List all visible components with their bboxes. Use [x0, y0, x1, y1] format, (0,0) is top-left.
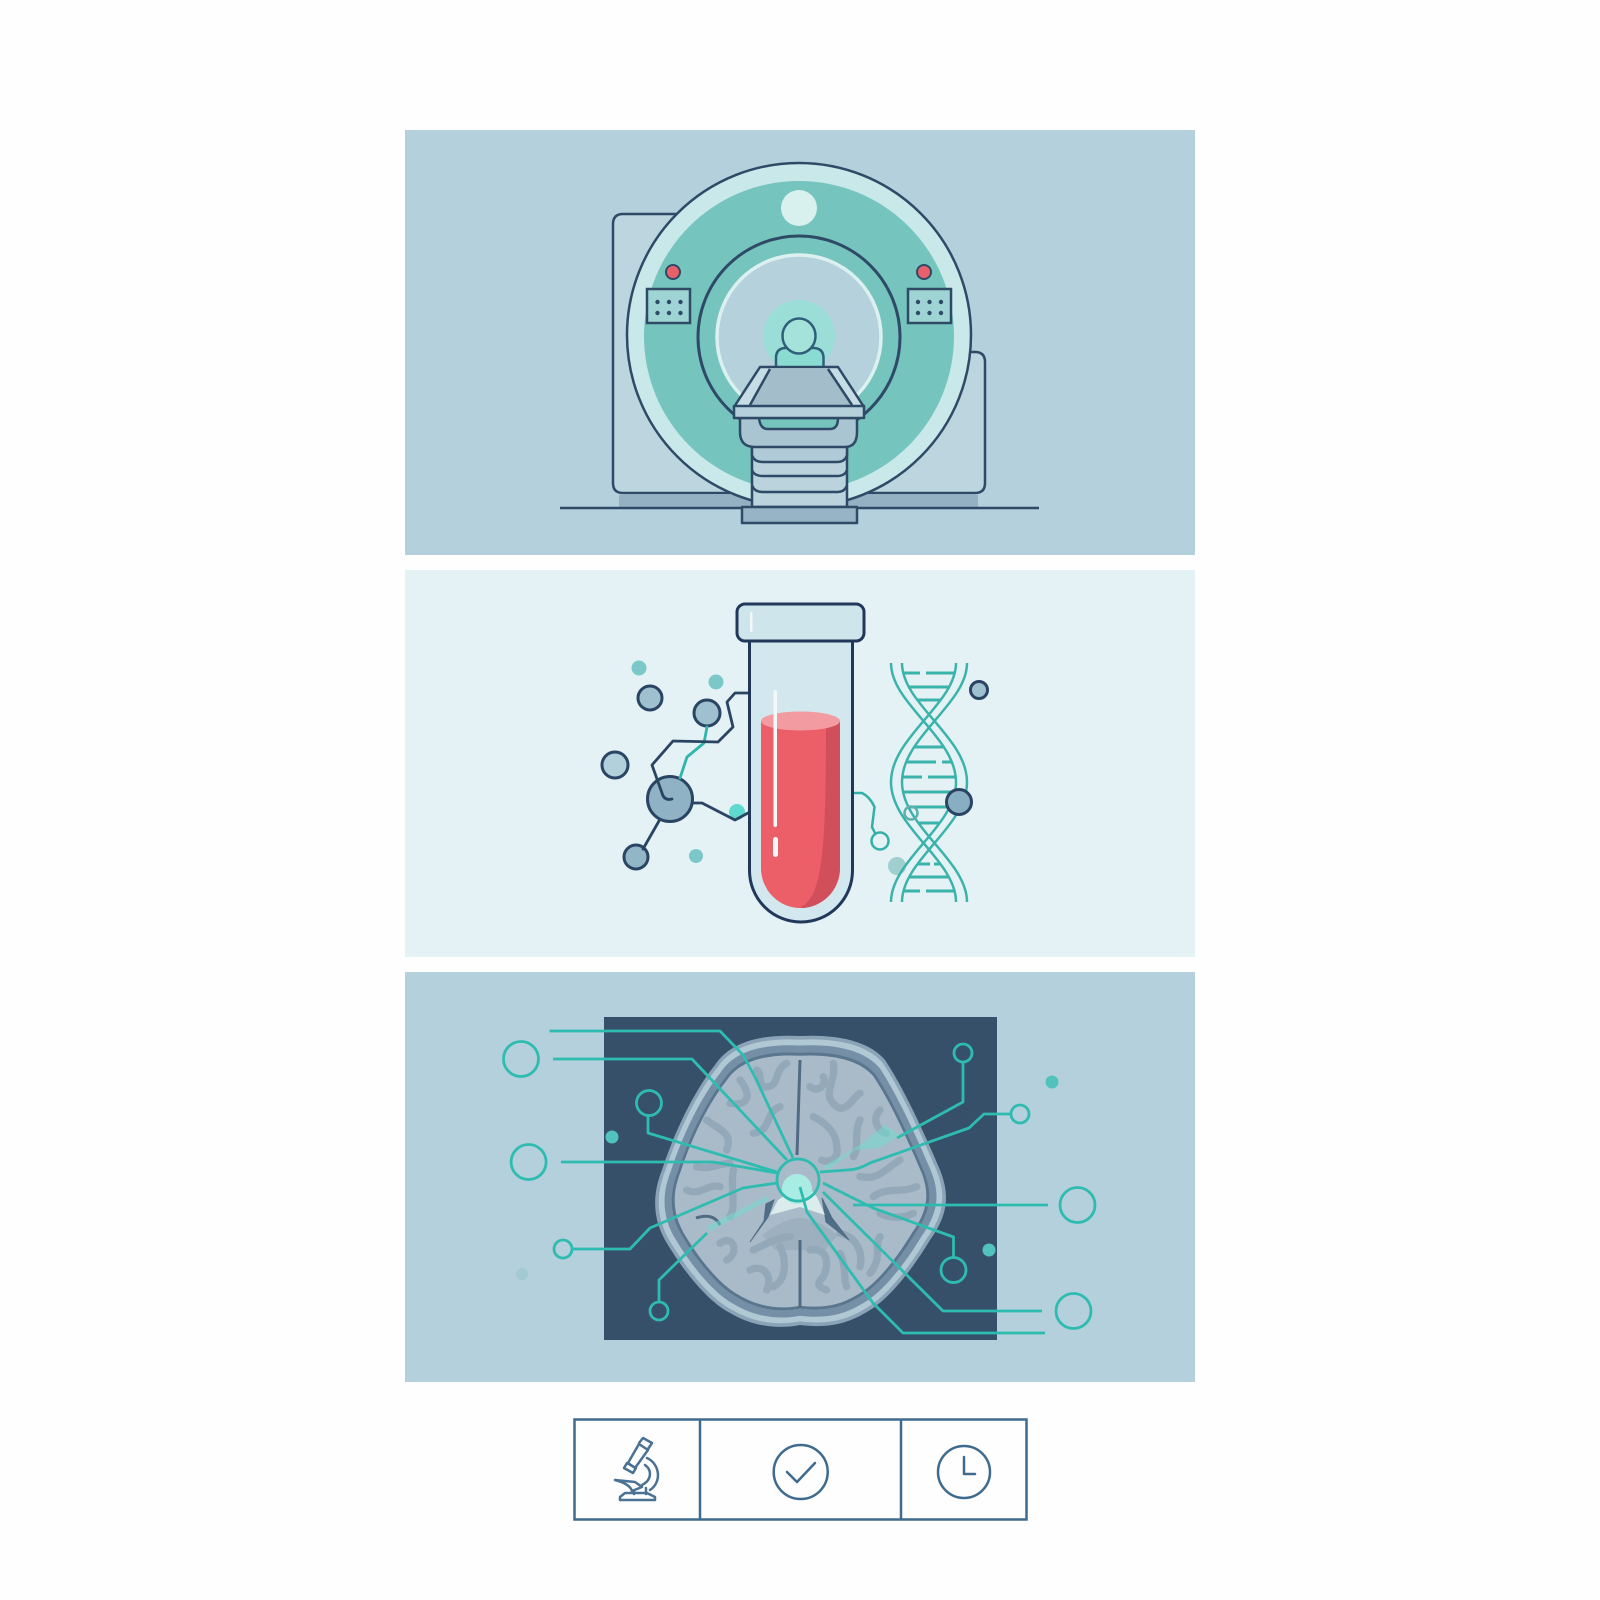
lower brain shade [762, 1218, 838, 1250]
gantry ring [627, 163, 971, 507]
icon: clock [938, 1446, 990, 1498]
probe end ring [872, 832, 888, 850]
DNA marker node [946, 790, 972, 814]
right control panel [908, 289, 951, 323]
patient figure [776, 318, 824, 368]
molecule nodes [602, 682, 988, 869]
scanner back housing [613, 214, 985, 493]
panel: MRI scanner [405, 130, 1195, 555]
DNA small ring [904, 806, 918, 820]
blood surface [761, 712, 840, 730]
central glow [782, 1174, 812, 1204]
scanner base strip [619, 495, 978, 508]
callout rings [504, 1042, 1095, 1328]
patient glow [763, 300, 835, 372]
blood [761, 721, 840, 908]
central ring [777, 1159, 819, 1201]
DNA helix [891, 663, 967, 902]
teal probe line [852, 793, 875, 833]
panel: blood test tube and DNA [405, 570, 1195, 957]
teal particles [632, 660, 906, 875]
ventricle dark horns [750, 1198, 849, 1242]
icon: microscope [615, 1438, 658, 1500]
test tube [737, 604, 864, 922]
blood shadow [800, 721, 840, 908]
brain folds [687, 1063, 917, 1290]
brain cross-section [655, 1036, 946, 1327]
footer icon bar [574, 1420, 1026, 1520]
tube cap [737, 604, 864, 641]
left control panel [647, 289, 690, 323]
teal dots [516, 1076, 1058, 1280]
panel: brain scan [405, 972, 1195, 1382]
callout lines [550, 1031, 1048, 1333]
tube highlights [774, 690, 777, 827]
floor line [560, 507, 1039, 509]
icon: check mark [774, 1445, 828, 1499]
cap highlight [750, 612, 752, 632]
gantry top light [781, 190, 817, 226]
indicator lights [666, 265, 931, 279]
ventricle highlight [770, 1180, 825, 1215]
midline and dark sulci [696, 1060, 800, 1308]
dark scan background [604, 1017, 997, 1340]
activity streaks [707, 1125, 900, 1232]
patient table [734, 367, 864, 523]
molecule connectors [643, 693, 748, 849]
